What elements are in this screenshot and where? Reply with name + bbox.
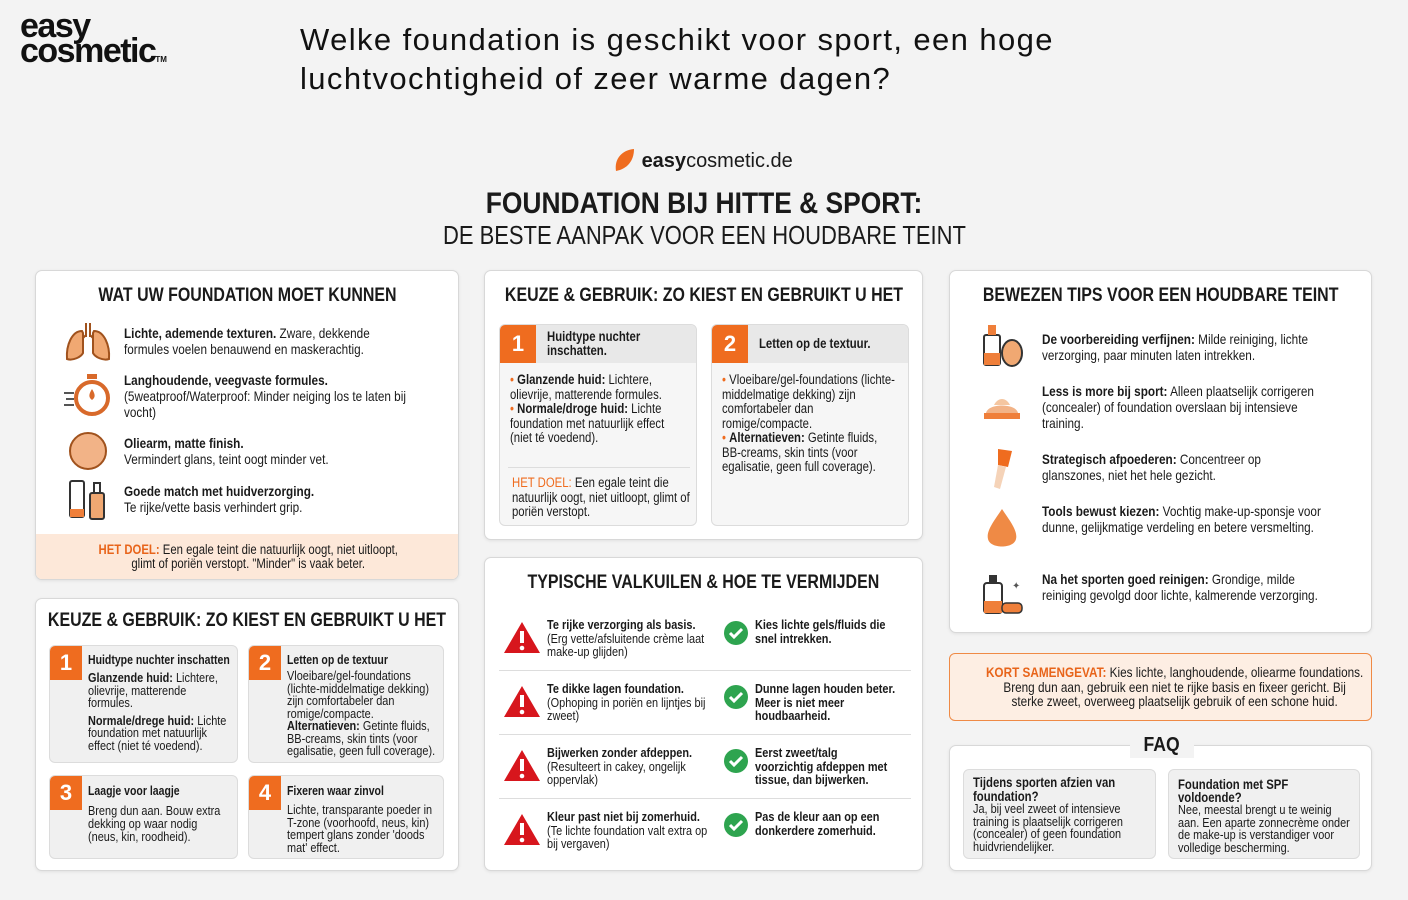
faq card 2	[1168, 769, 1360, 859]
panel: FAQ	[949, 745, 1372, 871]
card 4: Fixeren waar zinvol	[287, 784, 384, 798]
card 1: formules.	[88, 695, 133, 710]
tip 4: Tools bewust kiezen: Vochtig make-up-sponsje voor dunne, gelijkmatige verdeling en betere versmelting.	[1042, 503, 1321, 535]
panel: bewezen tips	[949, 270, 1372, 633]
tip 3	[994, 449, 1261, 489]
panel: wat uw foundation moet kunnen	[35, 270, 459, 580]
tip 2: Less is more bij sport: Alleen plaatselijk corrigeren (concealer) of foundation overslaan bij intensieve training.	[1042, 383, 1314, 431]
logo: easy	[20, 7, 90, 45]
card 1	[49, 645, 238, 763]
tip 5: ✦	[1012, 581, 1020, 592]
row 3: (Resulteert in cakey, ongelijk oppervlak)	[547, 758, 686, 787]
row 1	[504, 617, 886, 659]
text: goede match	[124, 483, 314, 515]
card 1	[499, 324, 697, 526]
row 3	[504, 745, 888, 787]
card 2: 2	[724, 331, 736, 356]
card 2: Vloeibare/gel-foundations (lichte-middelmatige dekking) zijn comfortabeler dan romige/compacte.	[287, 668, 429, 720]
card 1: • Normale/droge huid: Lichte foundation met natuurlijk effect (niet té voedend).	[510, 401, 664, 445]
card 1: Huidtype nuchter inschatten.	[547, 329, 640, 358]
card 4	[248, 775, 444, 859]
text: langhoudende	[124, 372, 406, 420]
card 1: 1	[512, 331, 524, 356]
panel: keuze & gebruik (left)	[35, 598, 459, 871]
panel: wat uw foundation moet kunnen: WAT UW FOUNDATION MOET KUNNEN	[98, 285, 396, 306]
card 1: • Glanzende huid: Lichtere, olievrije, matterende formules.	[510, 372, 662, 402]
row 3: Eerst zweet/talg voorzichtig afdeppen met tissue, dan bijwerken.	[755, 745, 887, 787]
card 1: Normale/drege huid: Lichte	[88, 712, 226, 728]
panel: typische valkuilen: TYPISCHE VALKUILEN & HOE TE VERMIJDEN	[528, 572, 879, 593]
row 4	[504, 809, 879, 851]
row 2	[504, 681, 895, 723]
card 2	[248, 645, 444, 763]
card 1: Glanzende huid: Lichtere,	[88, 670, 218, 685]
card 2: Letten op de textuur	[287, 653, 388, 667]
card 1: 1	[60, 650, 72, 675]
text: langhoudende: (5weatproof/Waterproof: Minder neiging los te laten bij vocht)	[124, 388, 406, 420]
card 3: Laagje voor laagje	[88, 784, 180, 798]
card 1: foundation met natuurlijk	[88, 725, 207, 740]
logo: cosmeticTM	[20, 32, 167, 70]
row 2: Te dikke lagen foundation.	[547, 681, 684, 696]
row 3: Bijwerken zonder afdeppen.	[547, 745, 692, 760]
text: oliearm: Vermindert glans, teint oogt minder vet.	[124, 451, 329, 467]
text: langhoudende: Langhoudende, veegvaste formules.	[124, 372, 328, 388]
panel: keuze & gebruik (left): KEUZE & GEBRUIK: ZO KIEST EN GEBRUIKT U HET	[48, 610, 446, 631]
card 4: 4	[259, 780, 271, 805]
tip 1	[983, 325, 1308, 367]
card 3: Breng dun aan. Bouw extra dekking op waar nodig (neus, kin, roodheid).	[88, 803, 220, 844]
callout: het doel: HET DOEL: Een egale teint die natuurlijk oogt, niet uitloopt,	[98, 542, 398, 557]
card 1: HET DOEL: Een egale teint die natuurlijk oogt, niet uitloopt, glimt of poriën verstopt.	[512, 475, 690, 519]
text: oliearm: Oliearm, matte finish.	[124, 435, 244, 451]
icon: powder	[69, 432, 107, 470]
row 4: Kleur past niet bij zomerhuid.	[547, 809, 700, 824]
main title: FOUNDATION BIJ HITTE & SPORT:	[486, 187, 922, 220]
icon: skincare bottles	[69, 480, 105, 520]
question title: Welke foundation is geschikt voor sport, een hoge luchtvochtigheid of zeer warme dagen?	[300, 22, 1054, 96]
tip 5	[983, 571, 1318, 614]
text: oliearm	[124, 435, 329, 467]
card 4: Lichte, transparante poeder in T-zone (voorhoofd, neus, kin) tempert glans zonder 'doods mat' effect.	[287, 802, 432, 854]
text: goede match: Goede match met huidverzorging.	[124, 483, 314, 499]
text: lichte ademende texturen: Lichte, ademende texturen. Zware, dekkende formules voelen benauwend en maskerachtig.	[124, 325, 370, 357]
card 2: Alternatieven: Getinte fluids, BB-creams, skin tints (voor egalisatie, geen full coverage).	[287, 718, 435, 758]
card 1: effect (niet té voedend).	[88, 738, 203, 752]
brand line: easycosmetic.de	[642, 150, 793, 172]
faq card 2: Nee, meestal brengt u te weinig aan. Een aparte zonnecrème onder de make-up is verstandiger voor volledige bescherming.	[1178, 802, 1350, 854]
tip 1: De voorbereiding verfijnen: Milde reiniging, lichte verzorging, paar minuten laten intrekken.	[1042, 331, 1308, 363]
callout: kort samengevat	[949, 653, 1372, 721]
icon: lungs	[66, 323, 110, 361]
text: goede match: Te rijke/vette basis verhindert grip.	[124, 499, 302, 515]
logo	[20, 7, 167, 70]
card 1: Huidtype nuchter inschatten	[88, 653, 230, 667]
card 3	[49, 775, 238, 859]
row 1: Te rijke verzorging als basis.	[547, 617, 695, 632]
panel: keuze & gebruik (middle): KEUZE & GEBRUIK: ZO KIEST EN GEBRUIKT U HET	[504, 285, 903, 306]
callout: het doel: glimt of poriën verstopt. "Minder" is vaak beter.	[131, 556, 365, 571]
faq card 2: Foundation met SPF voldoende?	[1178, 777, 1288, 804]
card 2: • Vloeibare/gel-foundations (lichte-middelmatige dekking) zijn comfortabeler dan romige/compacte.	[722, 372, 895, 430]
card 1: olievrije, matterende	[88, 682, 186, 698]
FAQ heading	[1130, 732, 1194, 758]
faq card 1: Ja, bij veel zweet of intensieve training is plaatselijk corrigeren (concealer) of geen foundation huidvriendelijker.	[973, 801, 1123, 854]
faq card 1	[963, 769, 1156, 859]
panel: bewezen tips: BEWEZEN TIPS VOOR EEN HOUDBARE TEINT	[983, 285, 1338, 306]
row 1: Kies lichte gels/fluids die snel intrekken.	[755, 617, 885, 646]
callout: kort samengevat: KORT SAMENGEVAT: Kies lichte, langhoudende, oliearme foundations.	[986, 664, 1363, 680]
panel: keuze & gebruik (middle)	[484, 270, 923, 540]
callout: het doel	[36, 534, 460, 581]
row 4: (Te lichte foundation valt extra op bij vergaven)	[547, 822, 707, 851]
callout: kort samengevat: sterke zweet, overweeg plaatselijk gebruik of een schone huid.	[1012, 693, 1338, 709]
row 1: (Erg vette/afsluitende crème laat make-up glijden)	[547, 630, 704, 659]
callout: kort samengevat: Breng dun aan, gebruik een niet te rijke basis en fixeer gericht. Bij	[1003, 678, 1346, 694]
icon: stopwatch	[64, 374, 110, 416]
panel: typische valkuilen	[484, 557, 923, 871]
card 2: • Alternatieven: Getinte fluids, BB-creams, skin tints (voor egalisatie, geen full coverage).	[722, 430, 877, 474]
tip 3: Strategisch afpoederen: Concentreer op glanszones, niet het hele gezicht.	[1042, 451, 1261, 483]
card 3: 3	[60, 780, 72, 805]
FAQ heading: FAQ	[1144, 734, 1180, 756]
card 2: 2	[259, 650, 271, 675]
subtitle: DE BESTE AANPAK VOOR EEN HOUDBARE TEINT	[443, 220, 965, 250]
tip 4	[988, 503, 1321, 546]
faq card 1: Tijdens sporten afzien van foundation?	[973, 775, 1115, 804]
card 2	[711, 324, 909, 526]
tip 5: Na het sporten goed reinigen: Grondige, milde reiniging gevolgd door lichte, kalmerende verzorging.	[1042, 571, 1318, 603]
card 2: Letten op de textuur.	[759, 336, 871, 351]
row 4: Pas de kleur aan op een donkerdere zomerhuid.	[755, 809, 879, 838]
row 2: Dunne lagen houden beter.	[755, 681, 895, 696]
row 2: (Ophoping in poriën en lijntjes bij zweet)	[547, 694, 705, 723]
row 2: Meer is niet meer houdbaarheid.	[755, 694, 844, 723]
